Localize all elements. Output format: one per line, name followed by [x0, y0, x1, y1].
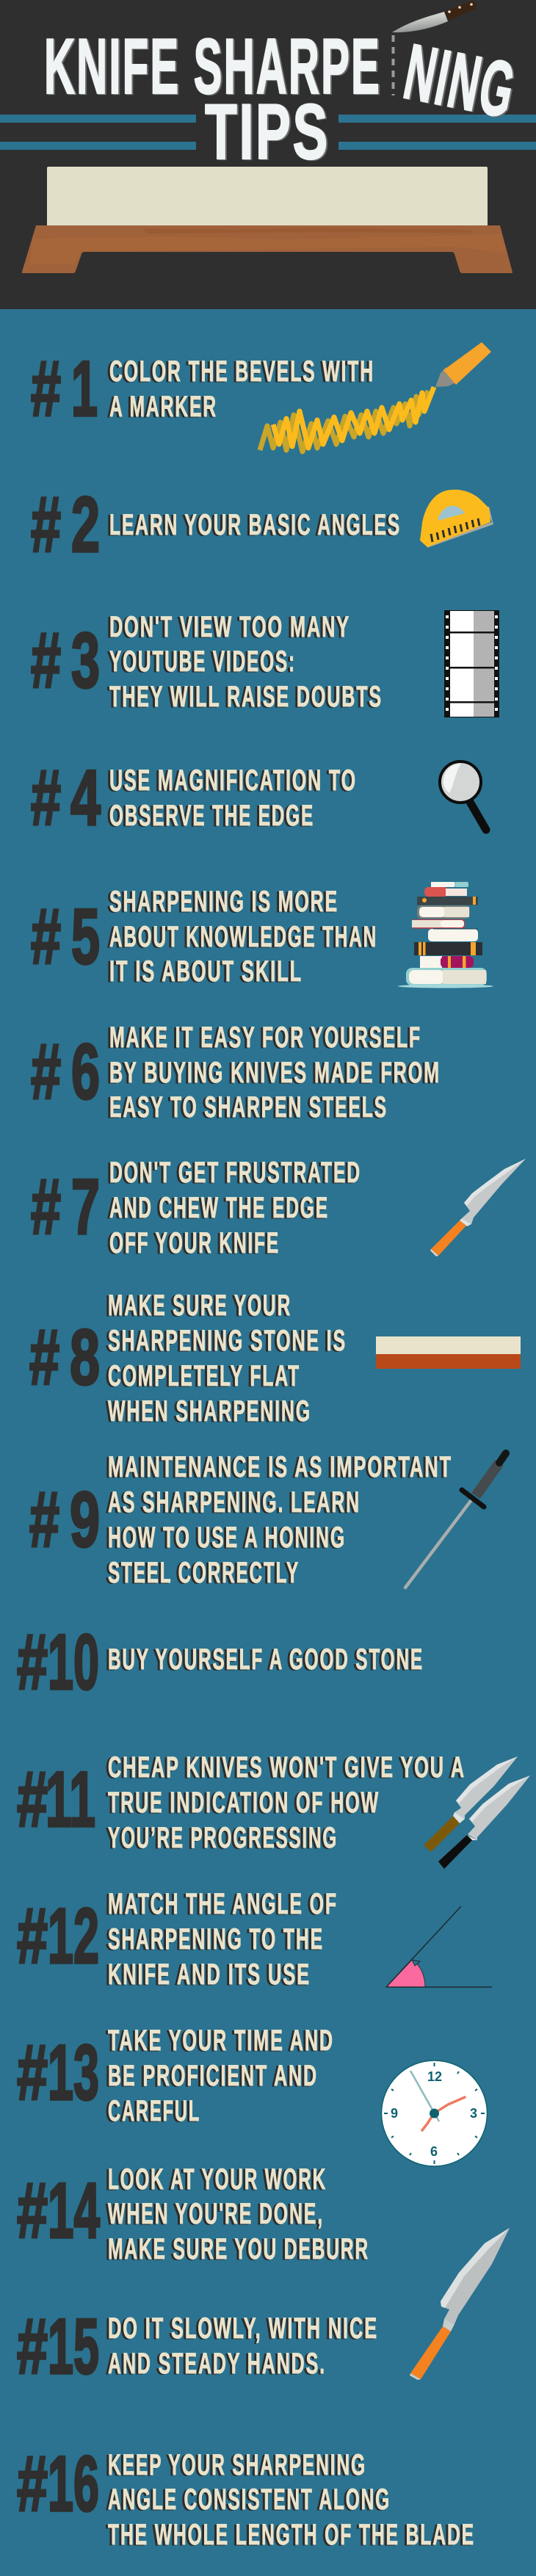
tip text: KEEP YOUR SHARPENING	[108, 2449, 366, 2481]
tip text	[108, 2312, 378, 2380]
number	[31, 1162, 100, 1251]
tip text: SHARPENING TO THE	[108, 1923, 324, 1955]
number: #	[31, 892, 61, 980]
number	[17, 2166, 100, 2254]
icon: clock: 3	[470, 2106, 477, 2121]
tip text	[109, 886, 377, 988]
tip 2	[31, 480, 493, 568]
number	[17, 1618, 99, 1706]
tip text: TRUE INDICATION OF HOW	[108, 1787, 380, 1819]
icon: stack of books	[398, 882, 493, 988]
title	[44, 22, 523, 176]
number	[31, 480, 100, 568]
number: #	[31, 480, 61, 568]
icon: large knife	[410, 2228, 510, 2380]
number: 6	[71, 1027, 100, 1115]
number: 8	[70, 1313, 100, 1401]
tip text	[108, 2163, 369, 2265]
tip text: DO IT SLOWLY, WITH NICE	[108, 2312, 378, 2345]
tip text	[108, 1451, 452, 1589]
tip text: MATCH THE ANGLE OF	[108, 1888, 338, 1920]
number: 14	[48, 2166, 100, 2254]
number: #	[31, 1027, 61, 1115]
icon: sharpening stone	[47, 167, 488, 226]
number: #	[17, 1892, 48, 1980]
number: 12	[48, 1892, 99, 1980]
tip text: LOOK AT YOUR WORK	[108, 2163, 327, 2196]
tip 15	[17, 2228, 510, 2390]
number: 7	[71, 1162, 100, 1251]
header panel	[0, 0, 536, 309]
tip text	[109, 1157, 361, 1259]
tip text: YOUTUBE VIDEOS:	[109, 645, 296, 678]
icon: marker with scribble	[260, 342, 491, 452]
number: 4	[70, 753, 101, 842]
tip 11	[17, 1751, 530, 1869]
tip text: AND CHEW THE EDGE	[109, 1192, 329, 1224]
tip 7	[31, 1157, 526, 1259]
number	[17, 1755, 95, 1843]
number: #	[29, 1313, 59, 1401]
icon: honing steel	[405, 1453, 506, 1588]
tip text: OBSERVE THE EDGE	[109, 800, 314, 832]
number: #	[17, 2166, 48, 2254]
tip 9	[29, 1451, 506, 1589]
icon: angle diagram	[386, 1906, 492, 1987]
number	[17, 2028, 99, 2116]
number: 10	[48, 1618, 99, 1706]
tip text	[109, 1021, 441, 1124]
tip text: AND STEADY HANDS.	[108, 2348, 326, 2380]
number: 15	[48, 2302, 99, 2390]
number: 11	[46, 1755, 95, 1843]
tip text	[108, 2449, 475, 2551]
tip text: HOW TO USE A HONING	[108, 1522, 346, 1554]
icon: protractor	[420, 490, 493, 548]
tip 4	[31, 753, 486, 842]
tip text: TAKE YOUR TIME AND	[108, 2025, 334, 2057]
number: 5	[71, 892, 100, 980]
tip text	[108, 1751, 466, 1854]
tip text: YOU’RE PROGRESSING	[108, 1822, 338, 1854]
tip text: CAREFUL	[108, 2095, 200, 2127]
tip text: COMPLETELY FLAT	[108, 1360, 300, 1392]
tip text: IT IS ABOUT SKILL	[109, 955, 303, 988]
number: 9	[70, 1475, 100, 1563]
tip 3	[31, 610, 499, 717]
number	[31, 1027, 100, 1115]
number: 13	[48, 2028, 99, 2116]
tip text: MAKE SURE YOUR	[108, 1289, 291, 1322]
tip text: A MARKER	[109, 391, 217, 423]
icon: clock: 9	[391, 2106, 398, 2121]
number	[29, 1313, 100, 1401]
tip text: SHARPENING IS MORE	[109, 886, 338, 918]
tip 12	[17, 1888, 492, 1991]
number: #	[31, 753, 61, 842]
icon: clock: 12	[427, 2069, 442, 2084]
tip text: DON'T GET FRUSTRATED	[109, 1157, 361, 1189]
icon: film strip	[444, 610, 499, 717]
number	[17, 1892, 99, 1980]
number: 3	[71, 616, 100, 704]
number	[17, 2439, 99, 2528]
tip 10	[17, 1618, 424, 1706]
number: #	[31, 1162, 61, 1251]
tip text	[109, 764, 357, 832]
tip text: AS SHARPENING. LEARN	[108, 1486, 361, 1519]
number: 1	[71, 344, 98, 433]
stripes beside TIPS	[0, 115, 536, 150]
number: #	[31, 616, 61, 704]
icon: flat stone	[376, 1336, 521, 1369]
number: #	[31, 344, 61, 433]
number	[17, 2302, 99, 2390]
tip text: COLOR THE BEVELS WITH	[109, 355, 374, 388]
number: 16	[48, 2439, 99, 2528]
number: #	[17, 1755, 48, 1843]
number	[31, 892, 100, 980]
number: #	[17, 2439, 48, 2528]
number: #	[17, 2302, 48, 2390]
tip text: DON'T VIEW TOO MANY	[109, 611, 350, 643]
number	[29, 1475, 100, 1563]
tip text: USE MAGNIFICATION TO	[109, 764, 357, 797]
icon: two knives	[424, 1756, 530, 1869]
tip text: THEY WILL RAISE DOUBTS	[109, 681, 383, 713]
tip 14	[17, 2163, 369, 2265]
tip text	[109, 611, 383, 713]
tip text: BE PROFICIENT AND	[108, 2060, 318, 2092]
number: #	[29, 1475, 59, 1563]
icon: wooden stone holder	[22, 225, 513, 273]
tip 6	[31, 1021, 441, 1124]
icon: chipped knife	[430, 1159, 526, 1256]
tip text: MAKE SURE YOU DEBURR	[108, 2233, 369, 2265]
tip text	[108, 1289, 347, 1428]
number: 2	[71, 480, 100, 568]
tip text	[108, 1888, 338, 1991]
tip text: SHARPENING STONE IS	[108, 1325, 347, 1357]
icon: clock	[382, 2061, 488, 2166]
icon: chef knife cutting the title	[392, 1, 477, 32]
number: #	[17, 1618, 48, 1706]
tip text: OFF YOUR KNIFE	[109, 1227, 280, 1259]
tip text: KNIFE AND ITS USE	[108, 1958, 311, 1991]
tip text: WHEN SHARPENING	[108, 1395, 311, 1428]
title: TIPS	[205, 87, 330, 176]
tip text: WHEN YOU'RE DONE,	[108, 2198, 324, 2230]
icon: clock: 6	[430, 2144, 438, 2159]
tip 5	[31, 882, 493, 988]
number: #	[17, 2028, 48, 2116]
tip text	[108, 2025, 334, 2127]
tip text: STEEL CORRECTLY	[108, 1557, 300, 1589]
number	[31, 344, 98, 433]
number	[31, 753, 101, 842]
tip 1	[31, 342, 491, 452]
dashed cut line	[392, 35, 395, 95]
tip 16	[17, 2439, 475, 2551]
icon: magnifying glass	[440, 761, 486, 830]
tip 13	[17, 2025, 488, 2166]
tip text	[109, 355, 374, 423]
tip 8	[29, 1289, 521, 1428]
number	[31, 616, 100, 704]
